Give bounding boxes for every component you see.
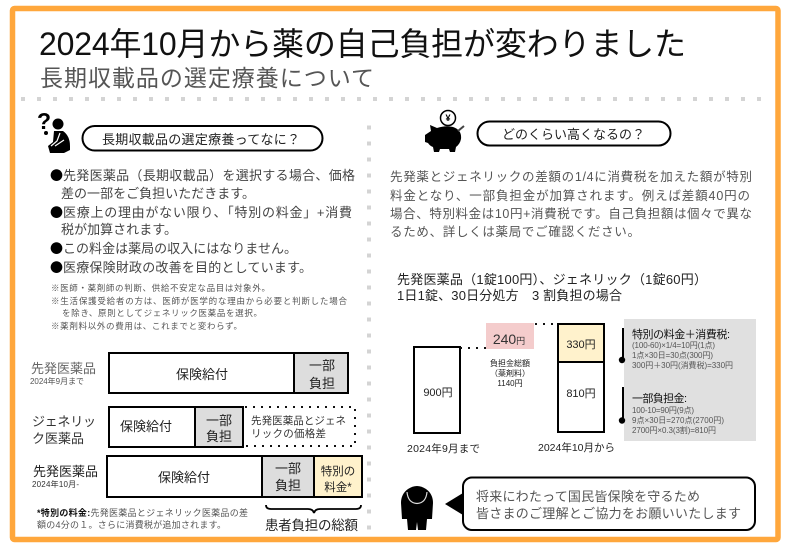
bullet list: 差の一部をご負担いただきます。 — [61, 186, 255, 201]
panel: burden bars — [30, 353, 362, 533]
chart: cost comparison — [407, 323, 615, 455]
example conditions: 1日1錠、30日分処方 3 割負担の場合 — [397, 288, 622, 303]
icon: piggy bank — [425, 110, 464, 152]
notes: を除き、原則としてジェネリック医薬品を選択。 — [62, 308, 262, 318]
icon: thinking person: ? — [37, 108, 51, 134]
bullet list: 税が加算されます。 — [61, 222, 177, 237]
bar row: brand drug until September: 2024年9月まで — [30, 376, 84, 386]
notes — [51, 283, 347, 331]
subtitle: 長期収載品の選定療養について — [40, 65, 374, 91]
bar row: brand drug from October — [32, 456, 362, 497]
bar row: brand drug until September: 保険給付 — [176, 367, 228, 382]
title: 2024年10月から薬の自己負担が変わりました — [39, 26, 686, 62]
panel: calculation details: 100-10=90円(9点) — [632, 406, 694, 415]
bar row: generic drug — [32, 407, 355, 447]
panel: calculation details: 9点×30日=270点(2700円) — [632, 416, 724, 425]
heading pill: what is it: 長期収載品の選定療養ってなに？ — [102, 132, 300, 147]
explanation text: 料金となり、一部負担金が加算されます。例えば差額40円の — [390, 188, 750, 203]
panel: how much more — [390, 110, 756, 455]
footnote — [37, 507, 248, 530]
explanation text: 先発薬とジェネリックの差額の1/4に消費税を加えた額が特別 — [390, 169, 752, 184]
heading pill: how much — [478, 122, 670, 146]
bar row: generic drug: 負担 — [206, 429, 232, 444]
icon: person bowing — [401, 486, 433, 530]
heading pill: how much: どのくらい高くなるの？ — [502, 127, 645, 142]
panel: calculation details: 一部負担金: — [632, 391, 687, 405]
bullet list: ● — [50, 165, 63, 184]
bar row: brand drug from October: 2024年10月- — [32, 479, 79, 489]
bar row: generic drug: 一部 — [206, 413, 232, 428]
chart: cost comparison: 240円 — [493, 331, 525, 347]
chart: cost comparison: （薬剤料） — [490, 368, 530, 378]
chart: cost comparison: 810円 — [566, 388, 596, 400]
chart: cost comparison: 900円 — [423, 387, 453, 399]
brace and total label — [265, 505, 361, 533]
example conditions: 先発医薬品（1錠100円）、ジェネリック（1錠60円） — [397, 272, 707, 287]
panel: calculation details: 300円＋30円(消費税)=330円 — [632, 360, 733, 370]
callout: closing message: 将来にわたって国民皆保険を守るため — [476, 489, 700, 504]
panel: calculation details: 1点×30日=30点(300円) — [632, 351, 713, 360]
bar row: generic drug: リックの価格差 — [251, 427, 326, 440]
bar row: brand drug from October: 先発医薬品 — [33, 464, 98, 479]
chart: cost comparison: 330円 — [566, 339, 596, 351]
bar row: brand drug until September: 一部 — [309, 358, 335, 373]
bar row: brand drug from October: 保険給付 — [158, 470, 210, 485]
example conditions — [397, 272, 707, 303]
bullet list: 医療上の理由がない限り、「特別の料金」+消費 — [63, 205, 352, 220]
bar row: brand drug until September: 先発医薬品 — [31, 361, 96, 376]
bullet list: 医療保険財政の改善を目的としています。 — [63, 260, 312, 275]
bullet list: ● — [50, 202, 63, 221]
chart: cost comparison: 2024年9月まで — [407, 442, 480, 455]
callout: closing message: 皆さまのご理解とご協力をお願いいたします — [476, 506, 741, 521]
chart: cost comparison: 負担金総額 — [490, 358, 530, 368]
footnote: *特別の料金:先発医薬品とジェネリック医薬品の差 — [37, 507, 248, 518]
bullet list: 先発医薬品（長期収載品）を選択する場合、価格 — [63, 168, 355, 183]
panel: calculation details — [619, 319, 756, 441]
chart: cost comparison: 1140円 — [497, 379, 523, 388]
panel: calculation details: 特別の料金＋消費税: — [632, 327, 730, 341]
bullet list: ● — [50, 257, 63, 276]
icon: piggy bank: ¥ — [445, 113, 451, 123]
bar row: brand drug from October: 一部 — [275, 461, 301, 476]
bar row: generic drug: 保険給付 — [120, 419, 172, 434]
footnote: 額の4分の１。さらに消費税が追加されます。 — [37, 519, 226, 530]
notes: ※医師・薬剤師の判断、供給不安定な品目は対象外。 — [51, 283, 270, 293]
bar row: brand drug until September: 負担 — [309, 376, 335, 391]
panel: what is selective care — [37, 108, 355, 331]
bar row: generic drug: ジェネリッ — [32, 414, 96, 429]
bar row: brand drug until September — [30, 353, 348, 393]
callout: closing message — [445, 478, 755, 530]
explanation text — [390, 169, 752, 239]
icon: thinking person — [37, 108, 70, 153]
explanation text: 場合、特別料金は10円+消費税です。自己負担額は個々で異な — [390, 206, 752, 221]
bar row: generic drug: ク医薬品 — [32, 431, 84, 446]
notes: ※生活保護受給者の方は、医師が医学的な理由から必要と判断した場合 — [51, 296, 347, 306]
heading pill: what is it — [82, 126, 322, 150]
panel: calculation details: (100-60)×1/4=10円(1点) — [632, 341, 715, 350]
bullet list — [50, 165, 355, 276]
bullet list: この料金は薬局の収入にはなりません。 — [63, 241, 297, 256]
explanation text: るため、詳しくは薬局でご確認ください。 — [390, 224, 640, 239]
bar row: brand drug from October: 特別の — [321, 464, 355, 478]
notes: ※薬剤料以外の費用は、これまでと変わらず。 — [51, 321, 242, 331]
chart: cost comparison: 2024年10月から — [538, 441, 615, 454]
bar row: brand drug from October: 料金* — [324, 480, 352, 494]
bar row: brand drug from October: 負担 — [275, 478, 301, 493]
bullet list: ● — [50, 238, 63, 257]
panel: calculation details: 2700円×0.3(3割)=810円 — [632, 425, 716, 435]
bar row: generic drug: 先発医薬品とジェネ — [251, 414, 346, 427]
brace and total label: 患者負担の総額 — [265, 518, 358, 533]
